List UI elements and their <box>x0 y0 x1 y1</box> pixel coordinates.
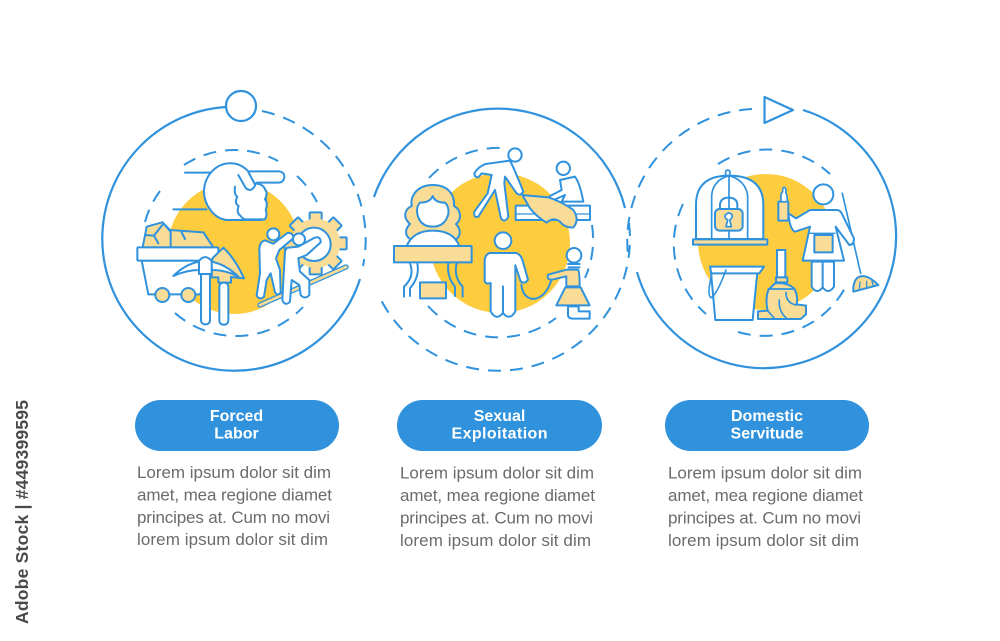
text block: domestic servitude <box>668 464 863 550</box>
icon: child <box>548 248 590 319</box>
text block: domestic servitude: amet, mea regione diamet <box>668 486 863 505</box>
icon: second worker <box>282 233 321 304</box>
label pill: sexual exploitation: Sexual <box>474 408 525 425</box>
icon: first worker <box>257 228 293 298</box>
icon: maid with bottle and broom <box>778 184 878 292</box>
icon: maid figure <box>788 184 854 291</box>
panel: domestic servitude <box>627 97 896 368</box>
label pill: domestic servitude: Servitude <box>731 426 804 442</box>
label pill: sexual exploitation: Exploitation <box>452 426 548 442</box>
icon: broom <box>842 193 878 292</box>
label pill: sexual exploitation <box>397 400 602 451</box>
icon: bucket and mop <box>709 250 806 320</box>
yellow backdrop circle <box>168 182 300 314</box>
icon: man and child on leash <box>485 232 590 319</box>
outer ring <box>102 107 366 371</box>
label pill: forced labor <box>135 400 339 451</box>
yellow backdrop circle <box>698 174 834 310</box>
icon: gear <box>285 212 347 274</box>
label pill: forced labor: Forced <box>210 408 263 425</box>
outer ring <box>374 109 630 371</box>
label pill: forced labor: Labor <box>214 426 259 442</box>
icon: staggering figure <box>474 148 523 220</box>
side credit text: Adobe Stock | #449399595 <box>12 400 32 624</box>
icon: bucket <box>709 267 764 320</box>
icon: shovel <box>212 248 244 325</box>
inner dashed ring <box>674 150 845 336</box>
icon: mop <box>758 250 806 319</box>
panel: sexual exploitation <box>374 109 630 371</box>
icon: man <box>485 232 528 317</box>
icon: pickaxe <box>173 257 239 324</box>
text block: sexual exploitation: lorem ipsum dolor sit dim <box>400 531 591 550</box>
text block: domestic servitude: Lorem ipsum dolor sit dim <box>668 464 862 482</box>
text block: sexual exploitation <box>400 464 595 550</box>
label pill: domestic servitude <box>665 400 869 451</box>
icon: mine cart and tools <box>137 222 244 325</box>
text block: forced labor: lorem ipsum dolor sit dim <box>137 530 328 549</box>
text block: domestic servitude: principes at. Cum no movi <box>668 508 861 528</box>
icon: person on bed <box>516 162 590 227</box>
text block: sexual exploitation: amet, mea regione diamet <box>400 486 595 505</box>
icon: workers pushing gear <box>257 212 347 305</box>
yellow backdrop circle <box>430 173 570 313</box>
inner dashed ring <box>145 150 317 336</box>
text block: domestic servitude: lorem ipsum dolor sit dim <box>668 531 859 550</box>
icon: mine cart <box>137 222 218 302</box>
icon: platform <box>260 267 346 305</box>
text block: forced labor: principes at. Cum no movi <box>137 508 330 527</box>
ring marker triangle <box>764 97 793 123</box>
text block: sexual exploitation: Lorem ipsum dolor sit dim <box>400 464 594 482</box>
text block: forced labor: amet, mea regione diamet <box>137 486 332 504</box>
icon: pointing hand <box>173 163 284 220</box>
icon: figures by the bed <box>474 148 590 227</box>
icon: woman at desk <box>394 185 472 298</box>
text block: sexual exploitation: principes at. Cum no movi <box>400 508 593 528</box>
panel: forced labor <box>102 91 366 371</box>
icon: leash <box>521 278 552 299</box>
label pill: domestic servitude: Domestic <box>731 408 803 425</box>
inner dashed ring <box>428 148 593 337</box>
icon: birdcage with padlock <box>693 170 767 245</box>
icon: bottle <box>778 187 788 221</box>
text block: forced labor: Lorem ipsum dolor sit dim <box>137 463 331 482</box>
text block: forced labor <box>137 463 332 549</box>
outer ring <box>627 109 896 368</box>
ring marker circle <box>226 91 256 121</box>
